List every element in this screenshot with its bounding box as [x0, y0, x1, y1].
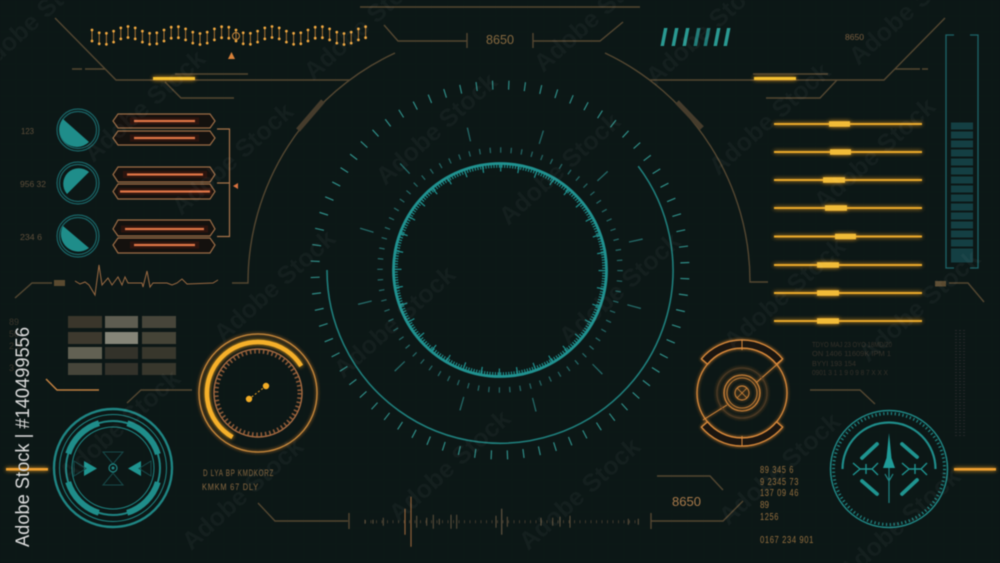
top header lines [55, 7, 945, 98]
outer tick ring [307, 77, 693, 463]
faint right text: ON 1406 11609K IPM 1 [812, 349, 891, 358]
stock watermarks: Adobe Stock [494, 107, 626, 231]
bracket with pointer [217, 129, 238, 236]
left labels: 123 [21, 126, 34, 136]
yellow header bars [153, 77, 796, 80]
faint left readout [9, 317, 22, 373]
lower right link under meter [935, 281, 984, 302]
stock watermarks: Adobe Stock [714, 407, 846, 531]
triangle marker [228, 52, 235, 59]
long marker ticks [330, 100, 670, 440]
stock watermarks: Adobe Stock [704, 57, 836, 181]
stock watermarks: Adobe Stock [177, 432, 309, 556]
lower right readout: 89 [760, 500, 769, 511]
large partial arc [327, 166, 673, 443]
faint left readout: 2 9 [9, 341, 22, 351]
central radar [307, 77, 693, 463]
faint dotted columns [956, 330, 964, 437]
side glow bars [6, 468, 996, 471]
heading number: 8650 [486, 32, 514, 47]
pie 2 [57, 162, 99, 204]
lower right readout: 89 345 6 [760, 465, 794, 476]
left labels: 956 32 [20, 179, 46, 189]
faint right text: BYYI 193 154 [812, 359, 856, 368]
left labels [20, 126, 46, 242]
compass [830, 410, 948, 528]
teal gauge left [54, 409, 172, 527]
vertical level meter [946, 35, 978, 268]
waveform strip [258, 476, 743, 547]
lower right readout: 1256 [760, 512, 779, 523]
stock watermarks: Adobe Stock [809, 92, 941, 216]
lower right readout: 0167 234 901 [760, 535, 814, 546]
dna wave [92, 26, 366, 44]
lower right number: 8650 [672, 494, 701, 509]
lower left caption: KMKM 67 DLY [202, 482, 259, 493]
teal slashes [660, 28, 730, 46]
vertical stock id: Adobe Stock | #140499556 [13, 327, 34, 547]
faint right text [812, 340, 892, 377]
lower right readout: 137 09 46 [760, 488, 799, 499]
middle tick ring [380, 150, 620, 390]
yellow gauge [199, 334, 317, 452]
stock watermarks: Adobe Stock [719, 232, 851, 356]
needle [883, 433, 895, 468]
stock watermarks: Adobe Stock [554, 227, 686, 351]
stock watermarks: Adobe Stock [384, 404, 516, 528]
orange target [697, 340, 787, 446]
stock watermarks: Adobe Stock [371, 67, 503, 191]
lower right readout: 9 2345 73 [760, 477, 799, 488]
inner orange bars [120, 121, 210, 245]
right link lines [650, 18, 945, 98]
faint left readout: 3 [9, 363, 14, 373]
inner scale ring [394, 164, 606, 376]
faint left readout: 50 [9, 329, 19, 339]
yellow sliders [774, 121, 922, 324]
small number top right: 8650 [845, 32, 864, 42]
lower right readout [760, 465, 814, 546]
hex bar groups [113, 114, 215, 253]
stock watermarks: Adobe Stock [514, 432, 646, 556]
stock watermarks: Adobe Stock [329, 260, 461, 384]
lower left caption [202, 468, 274, 493]
connector above compass [810, 390, 875, 404]
faint right text: 0901 3 1 1 9 0 9 8 7 X X X [812, 368, 888, 377]
faint left readout: 89 [9, 317, 19, 327]
large tan arcs [232, 53, 768, 283]
inner glow bands [118, 121, 212, 245]
stock watermarks: Adobe Stock [167, 97, 299, 221]
faint right text: TDYO MAJ 23 OYO 18MD/20 [812, 340, 892, 349]
pie dials [57, 109, 99, 257]
stock watermarks: Adobe Stock [854, 244, 986, 368]
pie 3 [57, 215, 99, 257]
block grid [68, 316, 176, 375]
left labels: 234 6 [20, 232, 42, 242]
stock watermarks: Adobe Stock [209, 224, 341, 348]
stock watermarks: Adobe Stock [79, 44, 211, 168]
pie 1 [57, 109, 99, 151]
ecg line [15, 265, 218, 298]
stock watermarks: Adobe Stock [54, 364, 186, 488]
left link lines [55, 18, 350, 98]
centre triangles [84, 461, 141, 476]
connector lines lower left [46, 379, 192, 403]
lower left caption: D LYA BP KMDKORZ [203, 468, 274, 479]
